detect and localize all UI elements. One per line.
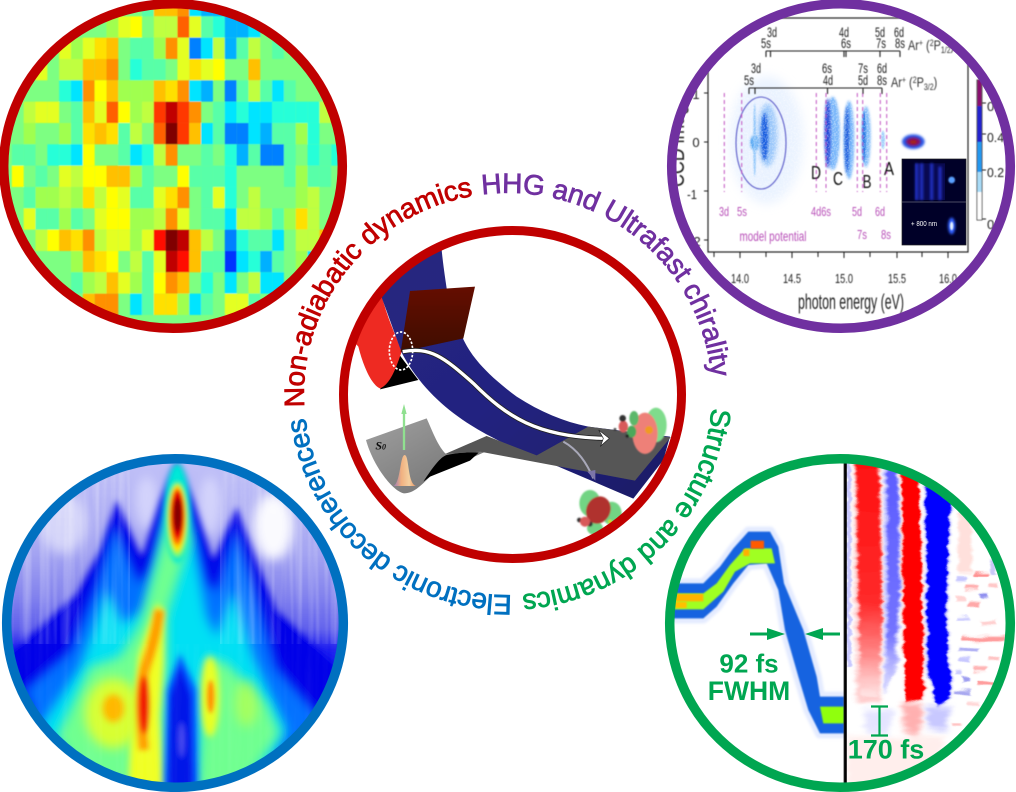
upper level labels: 3d [767,24,777,40]
inset: detector images: + 800 nm [911,219,937,228]
axis tick labels [687,87,957,286]
label: Ar+ 2P3/2: Ar [891,75,902,90]
panel: non-adiabatic dynamics heatmap [0,0,350,335]
upper level labels: 8s [877,72,887,88]
axis tick labels: 15.5 [888,271,906,286]
label: Ar+ 2P3/2: ) [934,75,937,90]
label: Ar+ 2P3/2: P [917,75,924,90]
model potential labels: 3d [719,204,729,219]
y axis title: CCD image [666,95,689,187]
model potential labels: 5s [737,204,747,219]
surface: grey well S0 [366,418,497,493]
marker: 170 fs bracket [871,706,888,736]
upper level labels: 5s [744,72,754,88]
icon: green excitation arrow [401,404,407,450]
upper level labels: 5d [875,24,885,40]
upper level labels: 7s [876,35,886,51]
label: Ar+ 2P1/2: 2 [930,38,934,48]
upper level labels: 6d [894,24,904,40]
model potential labels: 6d [875,204,885,219]
upper level labels: 6d [877,60,887,76]
peak letters: D [811,163,821,183]
axis tick labels: 0 [692,135,700,150]
axis tick labels: 14.0 [731,271,749,286]
panel: HHG photon energy spectrum [660,0,1016,335]
icon: molecule bottom [577,490,622,535]
heading: HHG and Ultrafast chirality: HHG and Ultrafast chirality [482,173,728,376]
trace: wavepacket signal [670,532,844,733]
colour bar: 0.2 [987,165,1004,180]
label: Ar+ 2P1/2: 1/2 [941,45,951,55]
heading: Structure and dynamics: Structure and dynamics [522,409,731,611]
label: 92 fs FWHM [708,648,790,706]
colour bar: 0.6 [987,99,1005,114]
peak letters [811,161,894,189]
surface: black underside [380,353,418,389]
axis tick labels: 15.0 [835,271,853,286]
panel: structure and dynamics pump-probe maps [660,450,1016,792]
label: 92 fs FWHM: 92 fs [719,648,779,678]
label: Ar+ 2P1/2: Ar [908,38,919,53]
panel: electronic decoherences spectrogram [0,450,350,792]
icon: wavepacket [393,455,416,486]
upper level labels: 5s [761,35,771,51]
label: Ar+ 2P3/2: 3/2 [924,82,934,92]
peak letters: A [884,159,894,179]
peak letters: B [862,172,872,192]
surface: grey flat S0 [445,427,671,481]
axis tick labels: 16.0 [939,271,957,286]
model potential labels: 4d6s [811,204,831,219]
label: Ar+ 2P1/2: ( [923,38,930,53]
inset: detector images [902,159,966,245]
icon: dashed conical intersection marker [389,332,413,370]
heading: Electronic decoherences: Electronic decoherences [291,419,510,616]
model potential labels: 8s [881,227,891,242]
x axis title: photon energy (eV) [798,291,904,314]
model potential labels: 7s [857,227,867,242]
upper level labels: 6s [841,35,851,51]
surface: red cone [356,298,402,388]
label: 92 fs FWHM: FWHM [708,676,790,706]
colour bar: 0.4 [987,130,1004,145]
heading: Non-adiabatic dynamics: Non-adiabatic dynamics [284,182,472,406]
upper level labels: 4d [823,72,833,88]
model potential labels: 5d [852,204,862,219]
panel: central potential energy surfaces [330,220,700,570]
upper level labels: 8s [895,35,905,51]
axis tick labels: -2 [689,234,701,249]
axis tick labels: 14.5 [783,271,801,286]
axis tick labels: 1 [692,87,700,102]
model potential labels [719,204,891,244]
label: Ar+ 2P1/2: + [919,38,923,48]
label: 170 fs: 170 fs [848,734,924,764]
chart frame and axes [708,18,968,252]
icon: white arrow trajectory [403,350,609,446]
label: Ar+ 2P3/2: ( [906,75,913,90]
label: Ar+ 2P3/2: 2 [913,75,917,85]
label: Ar+ 2P1/2: ) [951,38,954,53]
upper level labels: 5d [858,72,868,88]
peak letters: C [833,169,843,189]
model potential labels: model potential [740,228,806,244]
arrows: FWHM width markers [750,628,840,640]
map: difference signal bands [846,460,1005,787]
upper level labels: 7s [858,60,868,76]
colour bar: 0.0 [987,217,1005,232]
surface: maroon wall [401,287,475,352]
colour bar [977,80,1005,232]
axis tick labels: -1 [687,187,697,202]
label: S0: S0 [375,438,386,452]
icon: grey decay arrow [563,442,595,481]
upper level labels: 4d [839,24,849,40]
icon: molecule top [614,408,667,454]
label: Ar+ 2P1/2: P [934,38,941,53]
upper level labels: 6s [822,60,832,76]
upper level labels: 3d [751,60,761,76]
surface: blue excited state [382,240,670,499]
label: Ar+ 2P3/2: + [902,75,906,85]
upper level labels [744,24,905,88]
